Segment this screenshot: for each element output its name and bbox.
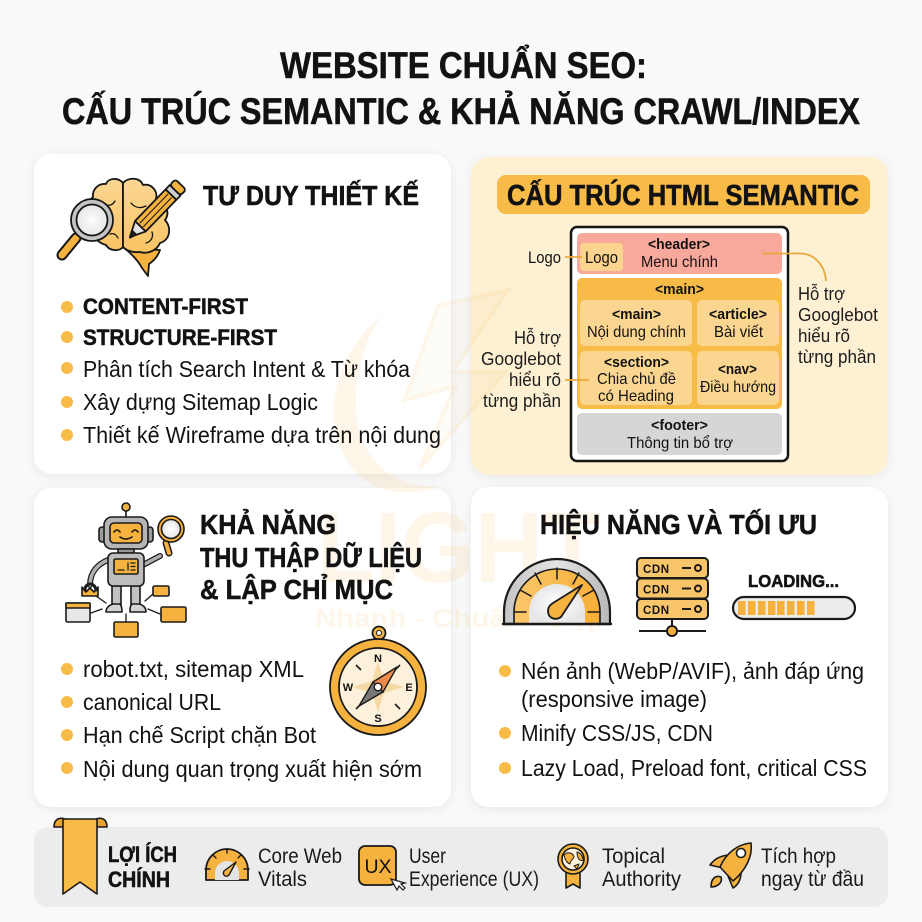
main block: Chia chủ đề (597, 371, 676, 388)
label: CHÍNH (108, 867, 170, 892)
icon: loading bar (733, 571, 855, 619)
bullet list: Xây dựng Sitemap Logic (83, 389, 318, 415)
panel background: khả năng thu thập (34, 488, 451, 807)
main block (577, 278, 782, 409)
panel background: hiệu năng (471, 487, 888, 807)
header block: Menu chính (641, 254, 718, 271)
main block: <main> (612, 306, 661, 323)
panel: hiệu năng và tối ưu (499, 508, 867, 781)
bullet list: Hạn chế Script chặn Bot (83, 722, 316, 748)
heading: TƯ DUY THIẾT KẾ (203, 180, 419, 211)
watermark: Nhanh - Chuẩn - Đẹp (315, 605, 605, 633)
label (108, 842, 177, 892)
item: user experience (359, 845, 539, 891)
panel: tư duy thiết kế (61, 179, 441, 448)
main block: có Heading (598, 388, 674, 405)
callout: left annotation: từng phần (483, 391, 561, 411)
title (62, 44, 860, 132)
callout: logo: Logo (528, 248, 561, 267)
heading: HIỆU NĂNG VÀ TỐI ƯU (540, 508, 817, 540)
icon: cdn servers (637, 558, 708, 636)
callout: left annotation: Googlebot (481, 349, 561, 369)
panel background: cấu trúc html semantic (471, 157, 888, 475)
callout: left annotation (481, 327, 589, 411)
main block: Nội dung chính (587, 324, 686, 341)
icon: cdn servers: CDN (643, 605, 669, 617)
item: user experience: UX (364, 856, 392, 878)
footer block (577, 413, 782, 455)
bullet list: CONTENT-FIRST (83, 294, 248, 319)
bullet list: Thiết kế Wireframe dựa trên nội dung (83, 422, 441, 448)
item: tích hợp: ngay từ đầu (761, 868, 864, 891)
main block: <nav> (718, 361, 757, 378)
bullet list: Nội dung quan trọng xuất hiện sớm (83, 756, 422, 782)
callout: right annotation: từng phần (798, 347, 876, 367)
icon: cdn servers: CDN (643, 584, 669, 596)
icon: compass: N (374, 653, 382, 665)
callout: left annotation: hiểu rõ (509, 370, 561, 390)
bullet list: robot.txt, sitemap XML (83, 656, 304, 682)
heading: KHẢ NĂNG (200, 508, 336, 540)
callout: right annotation (762, 254, 878, 367)
watermark (315, 290, 605, 633)
heading pill: CẤU TRÚC HTML SEMANTIC (507, 178, 859, 212)
watermark: LIGHT (317, 492, 601, 604)
callout: right annotation: Googlebot (798, 305, 878, 325)
panel: khả năng thu thập dữ liệu (61, 503, 426, 782)
bullet list: (responsive image) (521, 686, 707, 712)
item: user experience: User (409, 845, 446, 868)
title: WEBSITE CHUẨN SEO: (280, 44, 647, 86)
callout: right annotation: hiểu rõ (798, 326, 850, 346)
item: core web vitals: Core Web (258, 845, 342, 868)
bullet list: Phân tích Search Intent & Từ khóa (83, 356, 411, 382)
header block: Logo (585, 248, 618, 267)
heading: & LẬP CHỈ MỤC (200, 573, 393, 605)
item: core web vitals: Vitals (258, 868, 307, 891)
main block: Điều hướng (700, 379, 776, 396)
icon: compass: S (374, 713, 382, 725)
item: topical authority: Topical (602, 845, 665, 868)
bullet list: STRUCTURE-FIRST (83, 325, 277, 350)
callout: right annotation: Hỗ trợ (798, 283, 845, 304)
icon: loading bar: LOADING... (748, 571, 839, 591)
icon: cdn servers: CDN (643, 564, 669, 576)
item: topical authority: Authority (602, 868, 681, 891)
item: core web vitals (205, 845, 342, 891)
bullet list: Minify CSS/JS, CDN (521, 720, 713, 746)
item: topical authority (558, 844, 681, 891)
bullet list (61, 294, 441, 448)
header block (577, 233, 782, 274)
main block: <article> (709, 306, 767, 323)
panel background: tư duy thiết kế (34, 154, 451, 474)
icon: brain with magnifier and pencil (62, 179, 186, 276)
icon: ribbon (54, 818, 107, 894)
icon: compass: W (343, 682, 354, 694)
item: user experience: Experience (UX) (409, 868, 539, 891)
callout: left annotation: Hỗ trợ (514, 327, 561, 348)
label: LỢI ÍCH (108, 842, 177, 867)
bullet list: Nén ảnh (WebP/AVIF), ảnh đáp ứng (521, 658, 864, 684)
main block: <section> (604, 354, 669, 371)
heading (200, 508, 422, 605)
item: tích hợp: Tích hợp (761, 845, 836, 868)
panel: lợi ích chính bar (34, 818, 888, 907)
panel: cấu trúc html semantic (481, 175, 878, 461)
footer block: Thông tin bổ trợ (627, 434, 733, 452)
icon: speed gauge (503, 559, 611, 624)
bullet list: canonical URL (83, 689, 221, 715)
main block: <main> (655, 281, 704, 298)
bullet list (61, 656, 422, 782)
icon: robot with magnifier (66, 503, 186, 637)
header block: <header> (648, 236, 710, 253)
main block: Bài viết (714, 324, 764, 341)
page frame diagram (571, 227, 788, 461)
bullet list: Lazy Load, Preload font, critical CSS (521, 755, 867, 781)
footer block: <footer> (651, 417, 708, 434)
bullet list (499, 658, 867, 781)
item: tích hợp (710, 843, 864, 891)
heading: THU THẬP DỮ LIỆU (200, 542, 422, 573)
icon: compass: E (405, 682, 413, 694)
icon: compass (330, 626, 426, 735)
